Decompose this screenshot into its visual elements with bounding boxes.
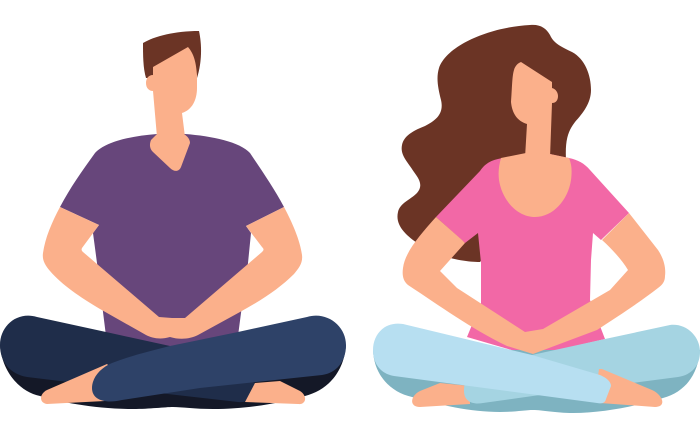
woman: head and neck	[511, 62, 558, 158]
figure: man	[0, 31, 346, 409]
woman: right foot	[598, 369, 662, 407]
man: hair	[143, 31, 201, 78]
man: head and neck	[146, 47, 197, 137]
man: front leg	[92, 316, 346, 402]
man: purple t-shirt	[60, 134, 284, 350]
woman: pink t-shirt	[436, 154, 629, 356]
man: right foot	[245, 381, 305, 404]
woman: hair	[397, 25, 591, 262]
man: leg shadow	[0, 345, 346, 409]
man: back leg	[0, 316, 256, 402]
man: collar skin	[150, 134, 190, 171]
man: arms and hands	[43, 207, 302, 339]
woman: front leg	[373, 324, 611, 403]
woman: chest skin	[499, 153, 572, 217]
woman: left foot	[412, 383, 470, 407]
woman: back leg upper	[464, 325, 700, 404]
woman: back leg	[373, 350, 700, 413]
figure: woman	[373, 25, 700, 413]
man: left foot	[41, 364, 112, 404]
woman: arms and hands	[403, 213, 665, 354]
